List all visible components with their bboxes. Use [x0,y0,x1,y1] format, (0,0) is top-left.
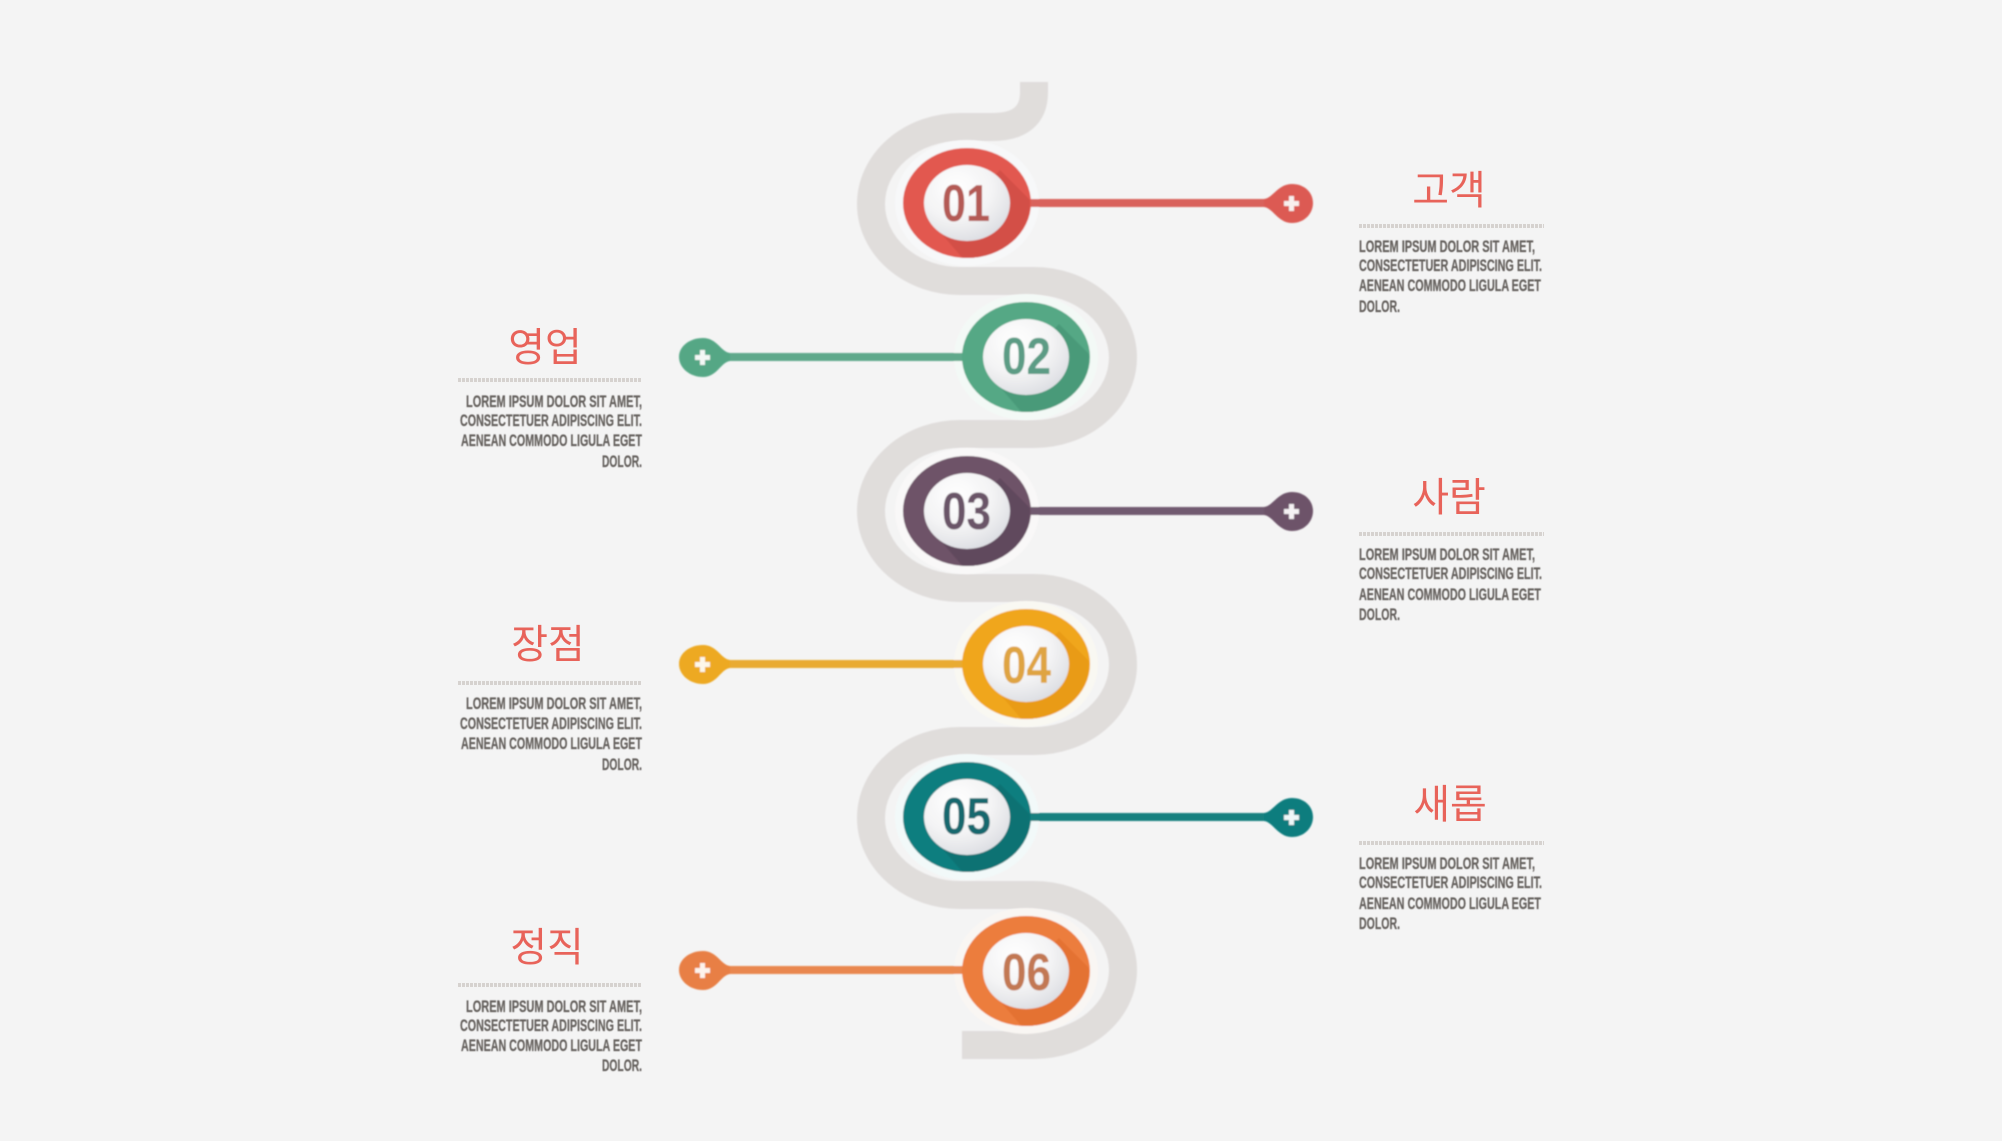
badge 03: 03 [942,483,991,541]
step 05 [902,754,1314,873]
pin 03 [1264,492,1313,531]
badge 01: 01 [942,175,990,233]
body text 고객: AENEAN COMMODO LIGULA EGET [1359,276,1541,295]
pin 01 [1264,184,1313,223]
pin 05 [1264,798,1313,837]
step 03 [902,455,1314,567]
label block: 고객 [1359,169,1544,316]
label block: 정직 [458,926,642,1075]
connector line 05 [1025,813,1268,821]
winding road ribbon [871,82,1123,1045]
connector line 04 [726,660,970,668]
body text 사람 [1359,545,1542,624]
label block: 사람 [1359,476,1544,624]
badge 02: 02 [1002,328,1051,386]
body text 정직 [460,997,642,1075]
pin 04 [679,645,730,684]
label block: 새롭 [1359,783,1544,933]
body text 영업: DOLOR. [602,452,642,471]
body text 새롭 [1359,854,1542,933]
connector line 02 [726,353,970,361]
body text 사람: AENEAN COMMODO LIGULA EGET [1359,585,1541,604]
badge 06 [961,915,1091,1027]
heading 영업: 영업 [508,326,582,370]
badge 05: 05 [942,788,991,846]
body text 새롭: AENEAN COMMODO LIGULA EGET [1359,894,1541,913]
body text 영업: AENEAN COMMODO LIGULA EGET [461,431,642,450]
label block: 영업 [458,326,642,471]
body text 사람: DOLOR. [1359,605,1400,624]
label block: 장점 [458,623,642,774]
body text 장점 [460,694,642,774]
body text 정직: AENEAN COMMODO LIGULA EGET [461,1036,642,1055]
connector line 06 [726,966,970,974]
body text 장점: CONSECTETUER ADIPISCING ELIT. [460,714,642,733]
body text 고객 [1359,237,1542,316]
body text 고객: CONSECTETUER ADIPISCING ELIT. [1359,256,1542,275]
heading 정직: 정직 [510,926,584,970]
body text 고객: LOREM IPSUM DOLOR SIT AMET, [1359,237,1535,256]
step 02 [678,294,1091,413]
badge 06: 06 [1002,944,1051,1002]
body text 정직: CONSECTETUER ADIPISCING ELIT. [460,1016,642,1035]
connector line 01 [1025,199,1268,207]
step 04 [678,600,1091,720]
body text 고객: DOLOR. [1359,297,1400,316]
connector line 03 [1025,507,1268,515]
heading 새롭: 새롭 [1413,783,1487,827]
pin 02 [679,338,730,377]
heading 고객: 고객 [1412,169,1486,213]
step 01 [902,140,1314,259]
body text 사람: CONSECTETUER ADIPISCING ELIT. [1359,564,1542,583]
body text 영업: CONSECTETUER ADIPISCING ELIT. [460,411,642,430]
step 06 [678,908,1091,1034]
body text 정직: LOREM IPSUM DOLOR SIT AMET, [466,997,642,1016]
body text 사람: LOREM IPSUM DOLOR SIT AMET, [1359,545,1535,564]
pin 06 [679,951,730,990]
badge 04: 04 [1002,637,1051,695]
badge 01 [902,147,1032,259]
badge 05 [902,761,1032,873]
body text 장점: AENEAN COMMODO LIGULA EGET [461,734,642,753]
body text 영업 [460,392,642,471]
heading 장점: 장점 [511,623,585,667]
body text 장점: LOREM IPSUM DOLOR SIT AMET, [466,694,642,713]
badge 03 [902,455,1032,567]
body text 장점: DOLOR. [602,755,642,774]
body text 새롭: CONSECTETUER ADIPISCING ELIT. [1359,873,1542,892]
body text 정직: DOLOR. [602,1056,642,1075]
body text 영업: LOREM IPSUM DOLOR SIT AMET, [466,392,642,411]
badge 02 [961,301,1091,413]
badge 04 [961,608,1091,720]
heading 사람: 사람 [1412,476,1486,520]
body text 새롭: DOLOR. [1359,914,1400,933]
body text 새롭: LOREM IPSUM DOLOR SIT AMET, [1359,854,1535,873]
